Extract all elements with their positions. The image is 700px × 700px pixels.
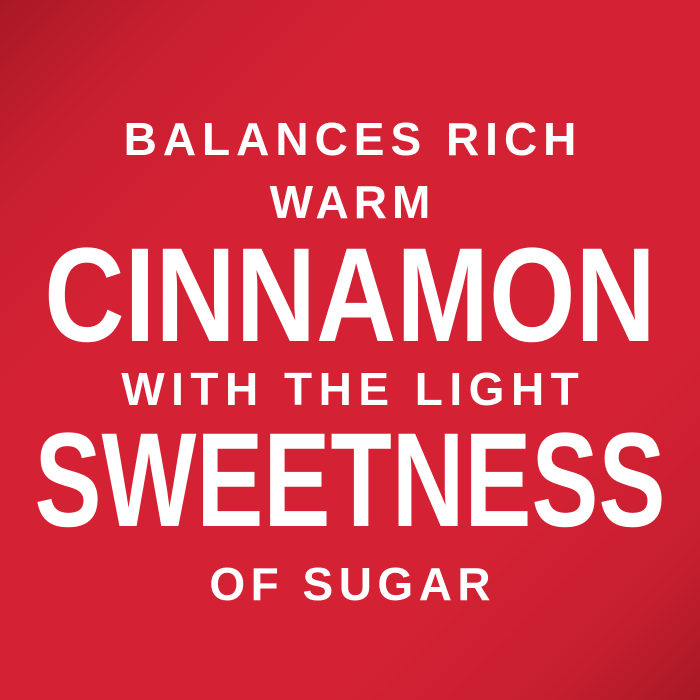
line: balances rich: BALANCES RICH bbox=[124, 113, 582, 165]
line: of sugar: OF SUGAR bbox=[209, 558, 496, 610]
line: with the light: WITH THE LIGHT bbox=[121, 363, 585, 415]
heading: sweetness: SWEETNESS bbox=[34, 406, 666, 555]
line: warm: WARM bbox=[270, 176, 435, 228]
heading: cinnamon: CINNAMON bbox=[44, 221, 656, 370]
